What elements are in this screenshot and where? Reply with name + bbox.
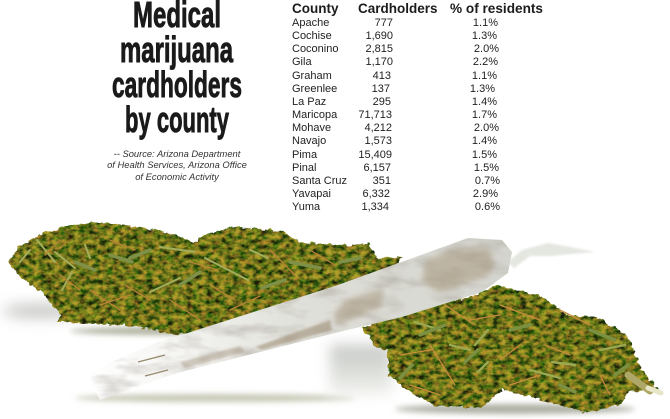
rolled joint [87,238,595,400]
county names: Maricopa [292,109,338,121]
table header: County [292,1,339,16]
title: marijuana [120,29,234,70]
cardholder counts: 15,409 [358,149,392,161]
title [112,0,242,140]
joint twisted paper tail [508,243,595,268]
cardholder counts: 413 [373,70,391,82]
county names: Yuma [292,201,321,213]
cardholder counts: 1,690 [365,30,393,42]
percent of residents: 0.6% [475,201,500,213]
title: by county [125,99,229,140]
cardholder counts: 2,815 [365,43,393,55]
percent of residents: 1.3% [470,83,495,95]
cardholder counts: 777 [375,17,393,29]
source note [107,148,247,182]
county names: Yavapai [292,188,331,200]
source note: -- Source: Arizona Department [114,148,241,159]
county names: Gila [292,56,312,68]
county names: Graham [292,70,332,82]
percent of residents: 1.5% [474,162,499,174]
percent of residents: 1.5% [472,149,497,161]
bud leaf highlights [400,305,661,395]
table header: Cardholders [358,1,438,16]
cardholder counts: 71,713 [358,109,392,121]
table header [292,1,543,16]
county names: Apache [292,17,329,29]
county names: Pima [292,149,318,161]
bud leaf highlights [20,240,360,320]
cardholder counts: 1,170 [365,56,393,68]
percent of residents: 1.1% [472,70,497,82]
cardholder counts: 1,573 [364,135,392,147]
table [292,1,543,213]
source note: of Economic Activity [135,171,220,182]
cardholder counts: 351 [373,175,391,187]
percent of residents [470,17,500,213]
cardholder counts: 137 [372,83,390,95]
percent of residents: 2.2% [473,56,498,68]
county names: Coconino [292,43,338,55]
table header: % of residents [450,1,543,16]
cardholder counts: 6,157 [363,162,391,174]
county names: Greenlee [292,83,337,95]
percent of residents: 1.3% [472,30,497,42]
joint body [87,238,512,400]
county names [292,17,347,213]
county names: Navajo [292,135,326,147]
percent of residents: 1.1% [473,17,498,29]
left marijuana bud [9,222,403,336]
percent of residents: 2.0% [474,122,499,134]
right marijuana bud [362,286,661,413]
cardholder counts: 4,212 [364,122,392,134]
cardholder counts: 295 [373,96,391,108]
percent of residents: 1.4% [472,96,497,108]
shadows on table surface [2,304,635,414]
cardholder counts: 6,332 [362,188,390,200]
title: cardholders [112,64,242,105]
county names: Santa Cruz [292,175,347,187]
cardholder counts [358,17,393,213]
joint visible filling [138,248,493,376]
percent of residents: 2.0% [474,43,499,55]
percent of residents: 1.4% [472,135,497,147]
county names: Mohave [292,122,331,134]
county names: Pinal [292,162,316,174]
county names: Cochise [292,30,332,42]
source note: of Health Services, Arizona Office [107,159,247,170]
cardholder counts: 1,334 [361,201,389,213]
percent of residents: 1.7% [472,109,497,121]
percent of residents: 2.9% [473,188,498,200]
percent of residents: 0.7% [475,175,500,187]
county names: La Paz [292,96,326,108]
